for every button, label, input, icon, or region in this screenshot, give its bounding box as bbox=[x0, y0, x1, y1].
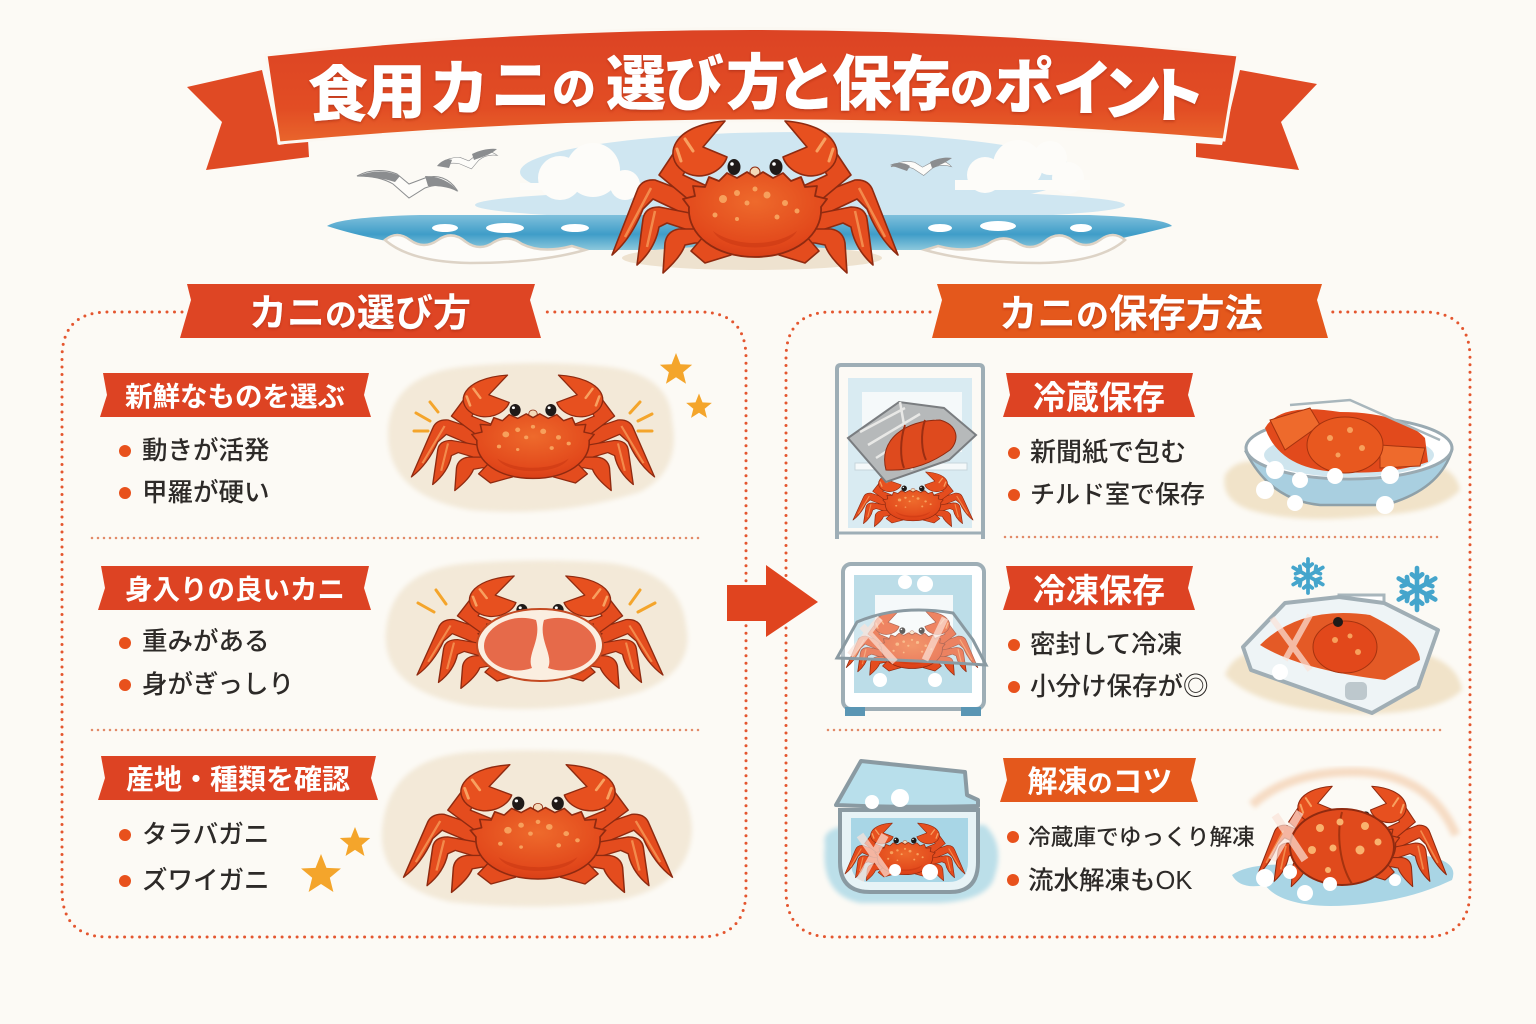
item: thawing bbox=[824, 758, 1456, 906]
fridge illustration bbox=[837, 365, 983, 539]
hero crab bbox=[612, 121, 898, 273]
bullet list bbox=[1008, 437, 1205, 509]
subheading bbox=[1003, 566, 1195, 610]
banner body bbox=[266, 28, 1238, 143]
item: origin and species bbox=[98, 750, 692, 907]
bullet list: 流水解凍もOK bbox=[1028, 867, 1192, 895]
plate of crab on ice bbox=[1224, 400, 1460, 519]
item: fresh crabs bbox=[100, 353, 712, 512]
subheading bbox=[98, 756, 378, 800]
bullet list bbox=[1007, 824, 1255, 895]
newspaper-wrapped crab bbox=[848, 402, 976, 482]
hero scene: beach with crab bbox=[327, 121, 1172, 273]
bullet list bbox=[119, 821, 270, 895]
bullet list: チルド室で保存 bbox=[1030, 481, 1205, 509]
title banner bbox=[187, 28, 1317, 170]
bullet list: ズワイガニ bbox=[142, 867, 270, 895]
illustration: crab cross-section bbox=[386, 560, 688, 709]
sky and clouds bbox=[475, 132, 1125, 221]
thawing container bbox=[824, 761, 998, 903]
thawing crab in water bbox=[1232, 772, 1456, 906]
subheading bbox=[1003, 373, 1195, 417]
arrow bbox=[727, 565, 818, 637]
bullet list: 動きが活発 bbox=[142, 437, 270, 465]
bullet list: 新聞紙で包む bbox=[1030, 437, 1186, 467]
subheading bbox=[98, 566, 371, 610]
item: well-filled crabs bbox=[98, 560, 688, 709]
subheading: 新鮮なものを選ぶ bbox=[125, 381, 345, 412]
subheading: 産地・種類を確認 bbox=[126, 764, 350, 795]
banner tails bbox=[187, 70, 1317, 170]
sea and waves bbox=[327, 215, 1172, 270]
section heading: カニの保存方法 bbox=[999, 293, 1263, 336]
subheading: 身入りの良いカニ bbox=[125, 574, 345, 605]
subheading bbox=[1000, 758, 1198, 802]
bullet list bbox=[119, 437, 270, 507]
section heading: カニの選び方 bbox=[249, 293, 471, 335]
panel frame bbox=[62, 312, 746, 937]
subheading: 解凍のコツ bbox=[1027, 766, 1173, 799]
subheading bbox=[100, 373, 371, 417]
bullet list: 冷蔵庫でゆっくり解凍 bbox=[1028, 824, 1255, 850]
subheading: 冷蔵保存 bbox=[1033, 379, 1165, 416]
panel: how to store crabs bbox=[786, 284, 1470, 937]
bullet list: 重みがある bbox=[142, 628, 270, 656]
panel frame bbox=[786, 312, 1470, 937]
item: freeze bbox=[837, 559, 1462, 716]
seagulls bbox=[357, 144, 952, 198]
bullet list: 密封して冷凍 bbox=[1030, 631, 1182, 659]
bullet list: 身がぎっしり bbox=[142, 671, 294, 699]
bullet list: 甲羅が硬い bbox=[142, 479, 270, 507]
bullet list bbox=[119, 628, 294, 699]
illustration: large crab with stars bbox=[301, 750, 692, 907]
title: 食用カニの選び方と保存のポイント bbox=[308, 50, 1206, 130]
subheading: 冷凍保存 bbox=[1033, 572, 1165, 609]
freezer illustration bbox=[837, 564, 986, 716]
freezer box with crab bbox=[1225, 595, 1462, 714]
section heading bbox=[932, 284, 1328, 338]
section heading bbox=[180, 284, 541, 338]
panel: how to choose crabs bbox=[62, 284, 746, 937]
snowflakes bbox=[1293, 559, 1435, 610]
bullet list bbox=[1008, 631, 1209, 701]
illustration: lively crab bbox=[388, 353, 712, 512]
bullet list: タラバガニ bbox=[142, 821, 269, 849]
bullet list: 小分け保存が◎ bbox=[1030, 673, 1209, 701]
item: refrigerate bbox=[837, 365, 1460, 539]
sealed bag bbox=[837, 610, 986, 665]
